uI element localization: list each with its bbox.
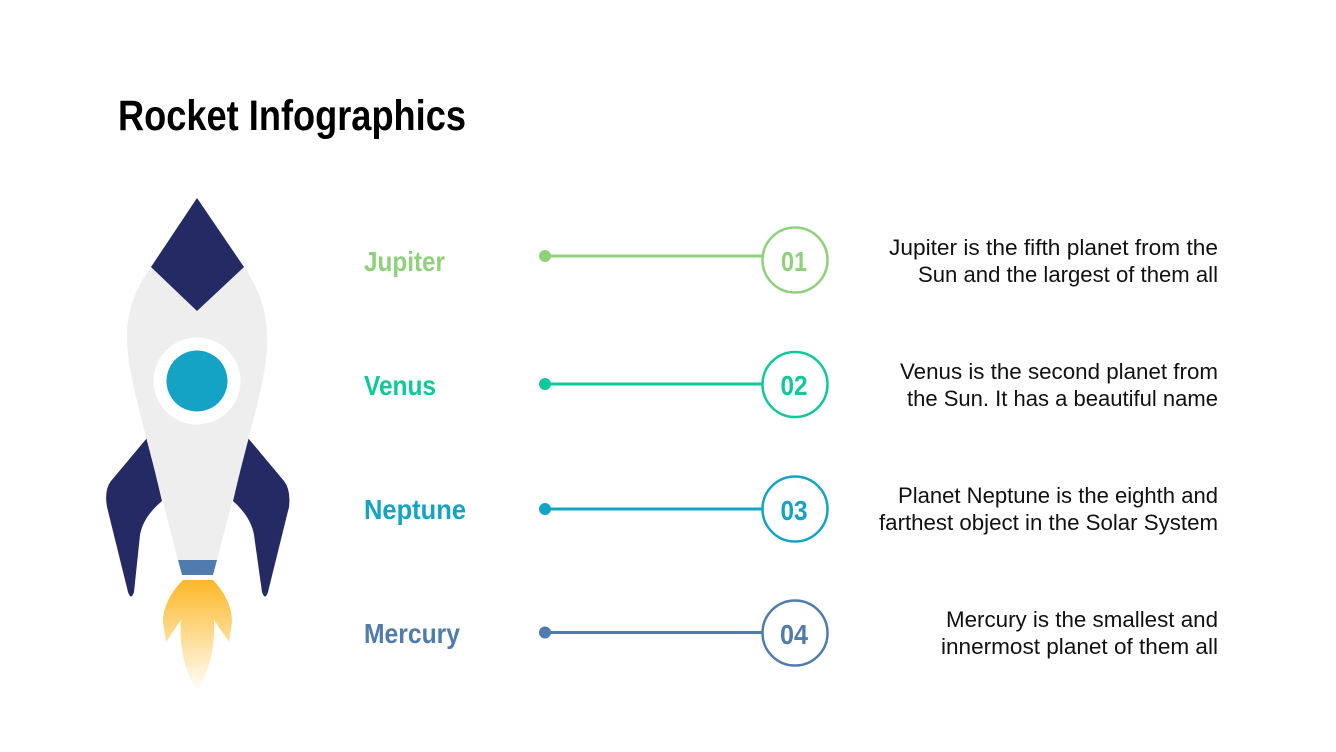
label: Venus: Venus xyxy=(364,370,436,401)
connector line: Jupiter xyxy=(539,250,762,262)
number badge 04: 04 xyxy=(780,619,808,650)
number badge 02: 02 xyxy=(780,370,808,401)
description: Jupiter xyxy=(889,235,1218,287)
window xyxy=(154,338,240,424)
description: Jupiter: Jupiter is the fifth planet from the xyxy=(889,235,1218,260)
row: Mercury xyxy=(364,600,1218,666)
number badge 03 xyxy=(762,476,828,542)
row: Venus xyxy=(364,352,1218,417)
rocket illustration xyxy=(106,198,289,692)
label: Neptune: Neptune xyxy=(364,494,466,525)
left fin xyxy=(106,438,162,596)
description: Venus xyxy=(900,359,1218,411)
description: Jupiter: Sun and the largest of them all xyxy=(918,262,1218,287)
row: Neptune xyxy=(364,476,1218,542)
connector line: Venus xyxy=(539,378,762,390)
description: Venus: the Sun. It has a beautiful name xyxy=(907,386,1218,411)
nose cone xyxy=(151,198,244,311)
description: Mercury xyxy=(941,607,1218,659)
nozzle xyxy=(178,560,217,575)
right fin xyxy=(233,438,289,596)
connector line: Neptune xyxy=(539,503,762,515)
number badge 01 xyxy=(762,228,828,292)
rocket body xyxy=(127,230,267,560)
description: Mercury: Mercury is the smallest and xyxy=(946,607,1218,632)
flame xyxy=(163,580,232,692)
title: Rocket Infographics xyxy=(118,92,466,140)
description: Mercury: innermost planet of them all xyxy=(941,634,1218,659)
description: Neptune: Planet Neptune is the eighth and xyxy=(898,483,1218,508)
row: Jupiter xyxy=(364,228,1218,292)
number badge 04 xyxy=(762,600,828,666)
label: Mercury: Mercury xyxy=(364,618,460,649)
number badge 01: 01 xyxy=(781,246,807,277)
number badge 03: 03 xyxy=(780,495,808,526)
connector line: Mercury xyxy=(539,626,762,638)
description: Neptune: farthest object in the Solar System xyxy=(879,510,1218,535)
number badge 02 xyxy=(762,352,828,417)
description: Neptune xyxy=(879,483,1218,535)
label: Jupiter: Jupiter xyxy=(364,246,445,277)
description: Venus: Venus is the second planet from xyxy=(900,359,1218,384)
